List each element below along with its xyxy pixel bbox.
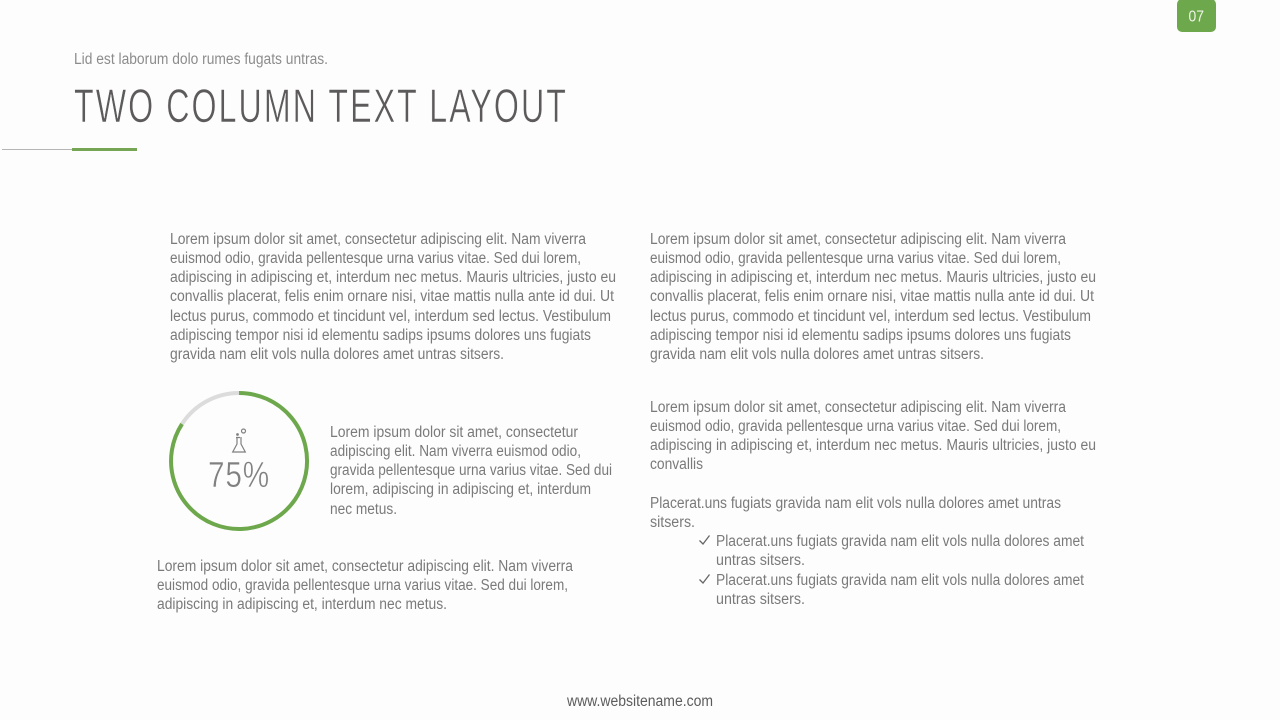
checklist [700,533,1085,608]
text block: right column third paragraph [650,495,1061,531]
text block: left column paragraph: Lorem ipsum dolor sit amet, consectetur adipiscing elit. Nam viverra [170,231,586,248]
list item two [716,572,1085,608]
page number badge [1177,0,1216,32]
icon: flask [233,429,246,452]
text block: left column paragraph [170,231,616,363]
text block: right column paragraph: convallis placerat, felis enim ornare nisi, vitae mattis nulla ante id dui. Ut [650,288,1095,305]
text block: right column paragraph: gravida nam elit vols nulla dolores amet untras sitsers. [650,346,984,363]
text block: left column paragraph: adipiscing tempor nisi id elementu sadips ipsums dolores uns fugiats [170,327,591,344]
text block: right column paragraph: Lorem ipsum dolor sit amet, consectetur adipiscing elit. Nam viverra [650,231,1066,248]
text block: beside ring [330,424,612,518]
text block: right column paragraph: lectus purus, commodo et tincidunt vel, interdum sed lectus. Vestibulum [650,308,1091,325]
text block: bottom left: Lorem ipsum dolor sit amet, consectetur adipiscing elit. Nam viverra [157,558,573,575]
title: TWO COLUMN TEXT LAYOUT [74,79,568,132]
text block: right column paragraph [650,231,1096,363]
ring track [182,393,239,424]
text block: bottom left [157,558,573,613]
progress ring: 75% [171,393,307,529]
icon: check [700,536,710,544]
text block: right column second paragraph: euismod odio, gravida pellentesque urna varius vitae. Sed dui lorem, [650,418,1061,435]
text block: right column second paragraph: Lorem ipsum dolor sit amet, consectetur adipiscing elit. Nam viverra [650,399,1066,416]
text block: beside ring: nec metus. [330,501,397,518]
text block: right column second paragraph: adipiscing in adipiscing et, interdum nec metus. Mauris ultricies, justo eu [650,437,1096,454]
list item one [716,533,1085,569]
ring progress [171,393,307,529]
text block: right column paragraph: euismod odio, gravida pellentesque urna varius vitae. Sed dui lorem, [650,250,1061,267]
text block: beside ring: lorem, adipiscing in adipiscing et, interdum [330,481,591,498]
text block: beside ring: Lorem ipsum dolor sit amet, consectetur [330,424,578,441]
text block: beside ring: gravida pellentesque urna varius vitae. Sed dui [330,462,612,479]
text block: right column second paragraph: convallis [650,456,703,473]
text block: left column paragraph: lectus purus, commodo et tincidunt vel, interdum sed lectus. Vestibulum [170,308,611,325]
text block: beside ring: adipiscing elit. Nam viverra euismod odio, [330,443,581,460]
subtitle: Lid est laborum dolo rumes fugats untras. [74,51,328,68]
list item one: Placerat.uns fugiats gravida nam elit vols nulla dolores amet [716,533,1085,550]
text block: left column paragraph: convallis placerat, felis enim ornare nisi, vitae mattis nulla ante id dui. Ut [170,288,615,305]
page number badge: 07 [1188,8,1204,26]
text block: right column second paragraph [650,399,1096,473]
list item one: untras sitsers. [716,552,805,569]
text block: left column paragraph: euismod odio, gravida pellentesque urna varius vitae. Sed dui lorem, [170,250,581,267]
list item two: Placerat.uns fugiats gravida nam elit vols nulla dolores amet [716,572,1085,589]
title underline [2,148,137,151]
text block: bottom left: euismod odio, gravida pellentesque urna varius vitae. Sed dui lorem, [157,577,568,594]
text block: right column paragraph: adipiscing in adipiscing et, interdum nec metus. Mauris ultricies, justo eu [650,269,1096,286]
icon: check [700,574,710,583]
text block: left column paragraph: gravida nam elit vols nulla dolores amet untras sitsers. [170,346,504,363]
percentage value: 75% [208,454,270,495]
text block: bottom left: adipiscing in adipiscing et, interdum nec metus. [157,596,447,613]
list item two: untras sitsers. [716,591,805,608]
text block: right column third paragraph: Placerat.uns fugiats gravida nam elit vols nulla dolores amet untras [650,495,1061,512]
footer website: www.websitename.com [566,693,713,710]
text block: left column paragraph: adipiscing in adipiscing et, interdum nec metus. Mauris ultricies, justo eu [170,269,616,286]
text block: right column paragraph: adipiscing tempor nisi id elementu sadips ipsums dolores uns fugiats [650,327,1071,344]
text block: right column third paragraph: sitsers. [650,514,695,531]
